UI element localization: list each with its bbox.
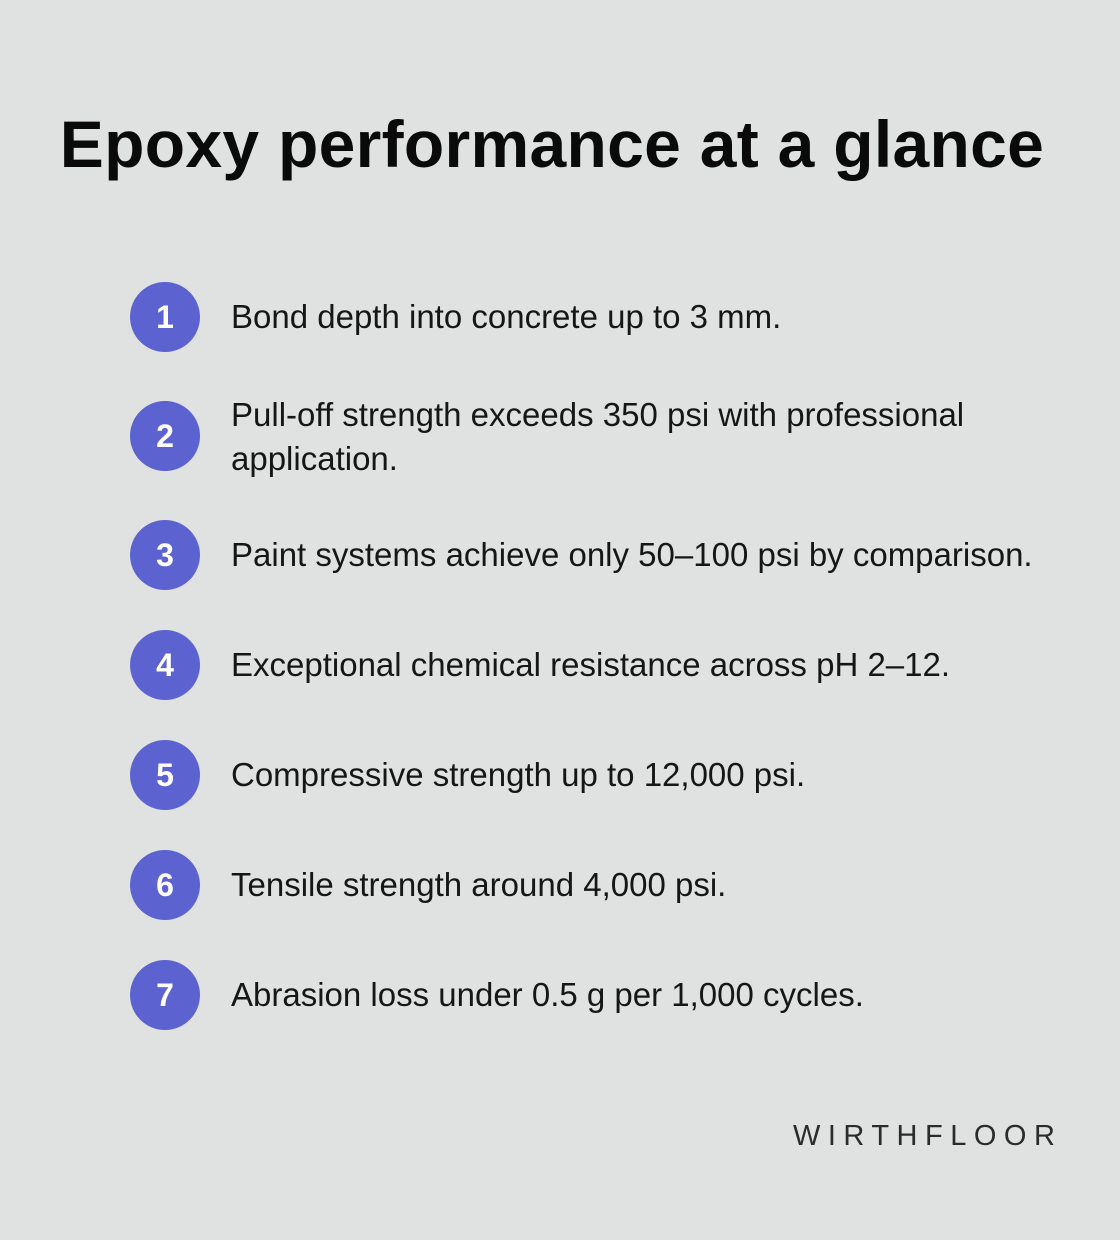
icon: number 5: 5 xyxy=(156,757,174,793)
item 4 xyxy=(130,630,950,700)
text 1: Bond depth into concrete up to 3 mm. xyxy=(231,298,781,335)
item 2 xyxy=(130,396,964,477)
text 7: Abrasion loss under 0.5 g per 1,000 cycles. xyxy=(231,976,864,1013)
text 2: Pull-off strength exceeds 350 psi with professional application. xyxy=(231,396,964,477)
title: Epoxy performance at a glance xyxy=(60,107,1044,181)
item 5 xyxy=(130,740,805,810)
logo: WIRTHFLOOR xyxy=(793,1120,1062,1152)
icon: number 7 xyxy=(130,960,200,1030)
icon: number 6 xyxy=(130,850,200,920)
text 5: Compressive strength up to 12,000 psi. xyxy=(231,756,805,793)
item 7 xyxy=(130,960,864,1030)
icon: number 4 xyxy=(130,630,200,700)
icon: number 2: 2 xyxy=(156,418,174,454)
icon: number 3: 3 xyxy=(156,537,174,573)
text 3: Paint systems achieve only 50–100 psi by comparison. xyxy=(231,536,1033,573)
item 3 xyxy=(130,520,1033,590)
icon: number 5 xyxy=(130,740,200,810)
icon: number 1 xyxy=(130,282,200,352)
icon: number 4: 4 xyxy=(156,647,174,683)
icon: number 7: 7 xyxy=(156,977,174,1013)
icon: number 1: 1 xyxy=(156,299,174,335)
icon: number 3 xyxy=(130,520,200,590)
item 6 xyxy=(130,850,726,920)
icon: number 2 xyxy=(130,401,200,471)
text 4: Exceptional chemical resistance across pH 2–12. xyxy=(231,646,950,683)
text 6: Tensile strength around 4,000 psi. xyxy=(231,866,726,903)
item 1 xyxy=(130,282,781,352)
icon: number 6: 6 xyxy=(156,867,174,903)
